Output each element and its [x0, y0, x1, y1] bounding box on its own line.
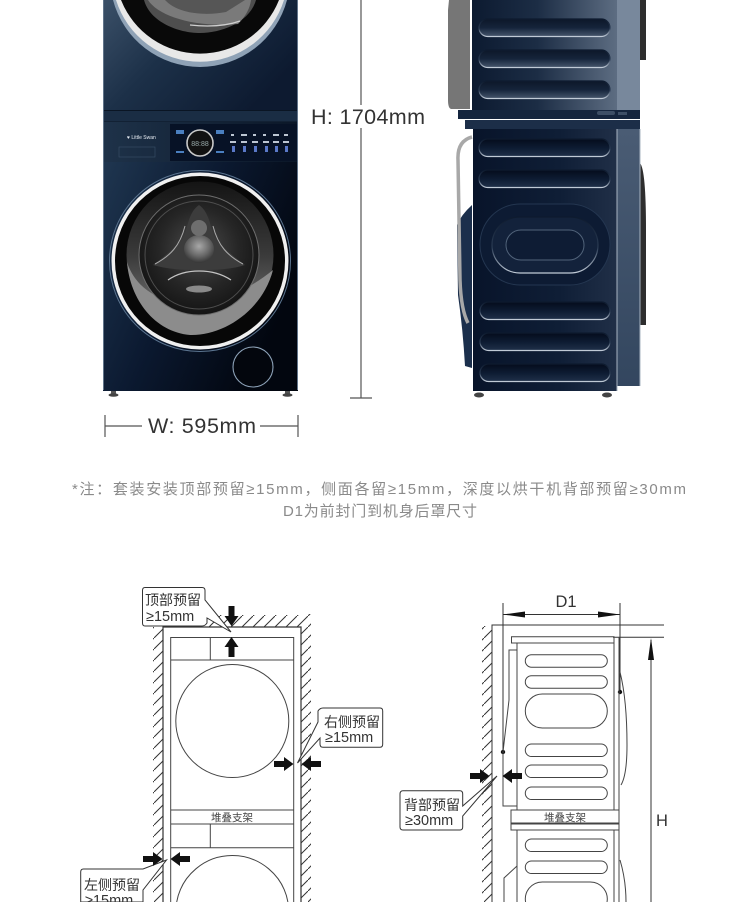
washer door — [110, 170, 290, 352]
washer body — [103, 162, 298, 391]
callout: top clearance: 顶部预留 — [145, 592, 201, 608]
lower slots — [479, 139, 610, 382]
display dial — [187, 130, 213, 156]
callout: top clearance: ≥15mm — [146, 609, 194, 625]
depth dimension D1: D1 — [555, 593, 577, 611]
feet — [474, 392, 612, 398]
wall hatching — [482, 626, 492, 902]
installation note: D1为前封门到机身后罩尺寸 — [283, 503, 477, 520]
callout: rear clearance: 背部预留 — [404, 797, 460, 813]
callout: rear clearance — [400, 776, 497, 830]
installation note — [72, 481, 686, 520]
program labels — [230, 134, 289, 143]
wall and top lines — [492, 625, 664, 902]
control panel — [103, 122, 298, 162]
callout: right clearance: 右侧预留 — [324, 714, 380, 730]
callout: right clearance: ≥15mm — [325, 730, 373, 746]
logo plate — [119, 147, 155, 157]
photo: side view of stacked units — [448, 0, 646, 398]
clearance arrows — [470, 769, 522, 783]
dimension: width — [105, 414, 298, 438]
wall hatching — [153, 614, 311, 902]
side edge highlight — [104, 0, 298, 390]
stacking ledge — [458, 110, 640, 119]
wall lines — [163, 627, 301, 902]
stack seam — [103, 110, 298, 122]
height dimension H: H — [656, 812, 668, 830]
dimension: width: W: 595mm — [148, 414, 256, 438]
brand logo: ♥ Little Swan — [127, 135, 156, 141]
upper body — [472, 0, 617, 110]
diagram: front clearance — [81, 588, 383, 902]
dimension: height — [311, 0, 425, 398]
machine outline — [503, 637, 627, 902]
rear parts — [448, 0, 470, 109]
dryer body — [103, 0, 298, 111]
callout: right clearance — [298, 708, 383, 763]
clearance arrows — [143, 606, 321, 866]
dimension: height: H: 1704mm — [311, 105, 425, 129]
photo: front view of stacked units — [103, 0, 298, 397]
panel buttons — [176, 130, 224, 153]
bracket label: 堆叠支架 — [544, 812, 586, 824]
central oval emboss — [480, 204, 610, 285]
callout: rear clearance: ≥30mm — [405, 813, 453, 829]
water inlet dial — [233, 347, 273, 387]
feet — [108, 391, 292, 397]
depth dimension D1 — [501, 593, 622, 754]
control panel: 88:88 — [191, 141, 209, 148]
front door edge — [640, 0, 646, 325]
callout: top clearance — [142, 588, 231, 632]
callout: left clearance — [81, 860, 166, 902]
machine outline — [171, 638, 294, 902]
lower body — [473, 129, 617, 391]
upper slots — [479, 19, 610, 98]
drum paddles — [153, 205, 245, 270]
diagram: side clearance — [400, 593, 668, 902]
height dimension H — [648, 638, 668, 902]
bracket label: 堆叠支架 — [211, 812, 253, 824]
installation note: *注：套装安装顶部预留≥15mm，侧面各留≥15mm，深度以烘干机背部预留≥30mm — [72, 481, 686, 498]
callout: left clearance: 左侧预留 — [84, 877, 140, 893]
dryer door — [113, 0, 287, 67]
